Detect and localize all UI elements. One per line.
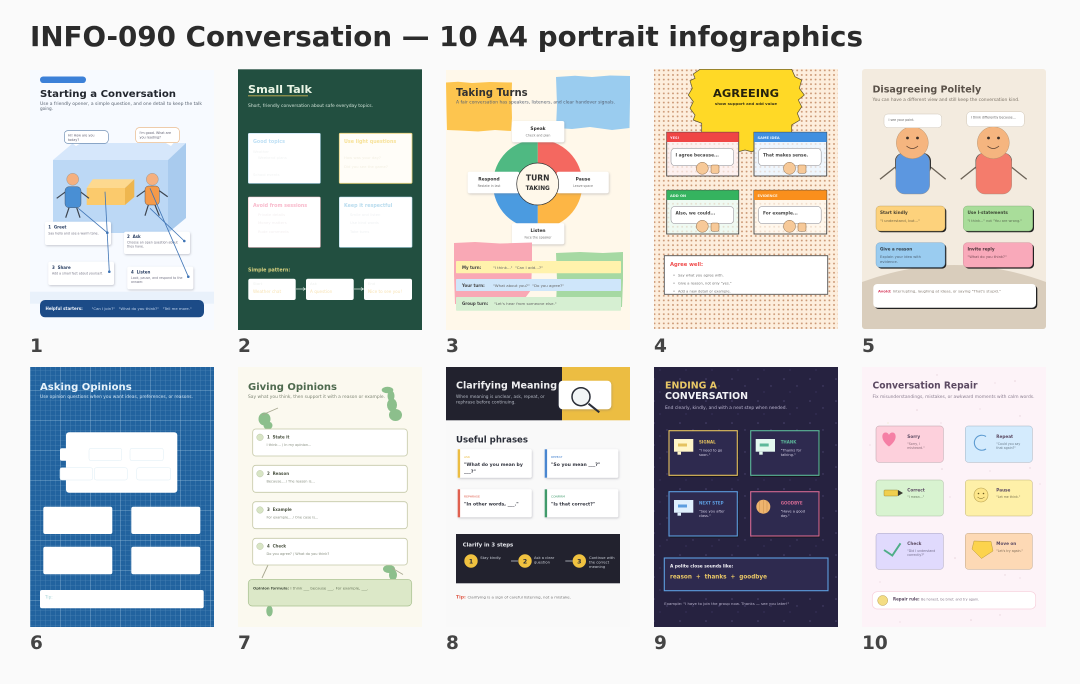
number 1: 1 [30, 336, 43, 357]
panel: 9 ending a conversation [654, 367, 838, 627]
avoid box: Avoid: Interrupting, laughing at ideas, or saying "That's stupid." [878, 288, 1001, 294]
wheel hub: TURN [526, 174, 549, 182]
number 10: 10 [862, 633, 888, 654]
avoid box [873, 284, 1037, 309]
subtitle: Short, friendly conversation about safe everyday topics. [248, 103, 373, 109]
steps panel: Continue with [589, 556, 615, 560]
heading: Disagreeing Politely [872, 85, 982, 96]
step 4 card [253, 538, 407, 565]
row my turn [456, 261, 621, 273]
underline [248, 95, 308, 96]
card thank [751, 431, 820, 477]
pattern step 3: End [368, 281, 376, 286]
title: INFO-090 Conversation — 10 A4 portrait infographics [30, 20, 863, 53]
heading: Small Talk [248, 83, 313, 96]
wheel hub [517, 163, 559, 205]
formula box [248, 579, 412, 606]
step 4 card: 4 Check [267, 544, 286, 548]
step 3 card: 3 Example [267, 507, 292, 512]
number 9: 9 [654, 633, 667, 654]
subtitle: Say what you think, then support it with a reason or example. [248, 394, 385, 399]
card thank: THANK [781, 439, 797, 444]
card add on: Also, we could... [676, 210, 716, 216]
card pause: Leave space [573, 184, 593, 188]
phrase card repeat: REPEAT [551, 455, 563, 459]
card light questions: How was your day? [344, 155, 381, 160]
steps panel: Clarify in 3 steps [463, 542, 513, 548]
card move on [965, 533, 1032, 569]
tip: Tip: Clarifying is a sign of careful listening, not a mistake. [456, 594, 571, 600]
person left [57, 173, 89, 218]
card bottom right [131, 547, 200, 574]
subtitle: going. [40, 106, 53, 111]
card evidence: EVIDENCE [758, 194, 778, 198]
card same idea: That makes sense. [763, 152, 809, 158]
subtitle: End clearly, kindly, and with a next step when needed. [665, 405, 787, 411]
person left [880, 127, 946, 194]
repair rule [872, 592, 1036, 609]
useful phrases heading: Useful phrases [456, 435, 528, 445]
phrase card ask: ___?" [464, 469, 476, 475]
step 3 card: For example... / One case is... [266, 516, 318, 520]
row your turn: Your turn: [461, 283, 485, 288]
polite close box: A polite close sounds like: [670, 564, 734, 570]
card light questions: Use light questions [344, 139, 396, 145]
agree well box: Say what you agree with. [678, 274, 724, 278]
card give a reason: Explain your idea with [880, 255, 922, 259]
step 2 card [253, 465, 407, 492]
card repeat: that again?" [996, 446, 1016, 450]
subtitle: Fix misunderstandings, mistakes, or awkward moments with calm words. [872, 394, 1034, 400]
panel: 5 disagreeing politely [862, 69, 1046, 329]
polite close box [664, 558, 828, 591]
card avoid: Money matters [258, 220, 287, 225]
card sorry: "Sorry, I [907, 442, 920, 446]
card correct [876, 480, 943, 516]
phrase card ask: "What do you mean by [464, 462, 523, 468]
number 4: 4 [654, 336, 667, 357]
speech bubble left: I see your point. [888, 118, 914, 122]
card give a reason [876, 243, 946, 269]
steps panel: meaning [589, 565, 605, 569]
steps panel: 1 [469, 558, 473, 565]
card invite reply: "What do you think?" [968, 255, 1007, 259]
callout 4: answer. [131, 280, 143, 284]
helpful starters bar: Helpful starters: [46, 306, 83, 311]
vine blobs [258, 387, 403, 616]
torn paper pink [454, 242, 532, 305]
speech bubble left: today? [68, 138, 79, 142]
panel: 7 giving opinions [238, 367, 422, 627]
pattern step 1: Weather chat [253, 289, 281, 294]
torn paper blue [556, 76, 630, 130]
agree well box: Agree well: [670, 262, 703, 268]
card give a reason: Give a reason [880, 246, 912, 252]
card goodbye: GOODBYE [781, 500, 803, 506]
card repeat: "Could you say [996, 442, 1020, 446]
row my turn: My turn: [462, 265, 482, 270]
step 3 card [253, 502, 407, 529]
heading: Taking Turns [456, 88, 528, 99]
card evidence [754, 190, 827, 234]
callout 1: 1 Greet [48, 224, 67, 230]
pattern step 2: A question [310, 289, 333, 294]
step 1 card: I think... / In my opinion... [266, 443, 311, 447]
speech bubble right: I'm good. What are [140, 131, 171, 135]
card start kindly: "I understand, but..." [880, 218, 920, 223]
panel: 3 taking turns [446, 70, 630, 330]
torn paper yellow [446, 82, 512, 132]
card move on: Move on [996, 541, 1016, 546]
phrase card repeat: "So you mean ___?" [551, 462, 600, 468]
step 1 card: 1 State it [267, 434, 289, 440]
heading: Asking Opinions [40, 382, 132, 393]
row group turn: "Let's hear from someone else." [494, 301, 557, 306]
heading: CONVERSATION [665, 391, 748, 402]
card give a reason: evidence. [880, 260, 898, 264]
card yes [667, 132, 739, 176]
panel: 2 small talk [238, 69, 422, 330]
card next step: "See you after [699, 510, 725, 514]
pattern step 1: Start [253, 281, 263, 286]
row group turn [456, 297, 621, 311]
repair rule: Repair rule: Be honest, be brief, and try again. [893, 597, 979, 602]
subtitle: You can have a different view and still keep the conversation kind. [871, 97, 1020, 102]
callout 2: 2 Ask [127, 234, 141, 239]
heading: Starting a Conversation [40, 89, 176, 100]
speech bubble left [64, 131, 108, 146]
card yes: I agree because... [676, 152, 719, 158]
heading: Giving Opinions [248, 382, 337, 393]
phrase card rephrase: "In other words, ___." [464, 502, 519, 508]
pattern step 3 [364, 279, 412, 300]
card sorry: misheard." [907, 446, 925, 450]
card respectful: Smile and listen [350, 212, 381, 217]
steps panel: 3 [577, 558, 581, 565]
callout 2: they have. [127, 245, 144, 249]
card thank: talking." [781, 453, 796, 457]
phrase card rephrase [458, 489, 532, 517]
card respond: Respond [478, 176, 500, 182]
card respectful: Take turns [349, 229, 369, 234]
steps panel: question [534, 560, 551, 564]
speech bubble right [136, 128, 179, 146]
step 2 card: Because... / The reason is... [266, 479, 315, 483]
band [30, 292, 214, 304]
number 5: 5 [862, 336, 875, 357]
card listen [512, 223, 564, 244]
agree well box: Give a reason, not only "yes." [678, 282, 732, 286]
card avoid: Avoid from sessions [253, 203, 307, 209]
speech bubble left [884, 114, 942, 128]
card avoid: Rude comments [258, 229, 289, 234]
subtitle: Use a friendly opener, a simple question, and one detail to keep the talk [40, 101, 203, 106]
card respond [468, 172, 519, 193]
phrase card confirm: "Is that correct?" [551, 502, 595, 508]
card next step: class." [699, 514, 711, 518]
subtitle: When meaning is unclear, ask, repeat, or [456, 394, 545, 400]
card move on: "Let's try again." [996, 549, 1024, 553]
card use i-statements: "I think..." not "You are wrong." [968, 219, 1022, 223]
row your turn [456, 279, 621, 291]
pill tag [40, 76, 86, 83]
example: Example: "I have to join the group now. Thanks — see you later!" [664, 601, 789, 606]
card start kindly: Start kindly [880, 210, 908, 215]
helpful starters bar: "Can I join?" "What do you think?" "Tell me more." [92, 307, 192, 311]
card signal: soon." [699, 453, 711, 457]
panel: 1 starting a conversation [30, 70, 214, 330]
steps panel: Stay kindly. [480, 556, 502, 560]
card correct: "I mean..." [907, 495, 925, 499]
card check: correctly?" [907, 553, 925, 557]
card pause: "Let me think." [996, 495, 1021, 499]
leader lines [78, 188, 189, 278]
card respectful: Keep it respectful [344, 203, 393, 209]
card light questions: Did you see the game? [344, 164, 388, 169]
agree well box: Add a new detail or example. [678, 290, 731, 294]
row your turn: "What about you?" "Do you agree?" [493, 283, 564, 288]
phrase card confirm [545, 489, 618, 517]
tip bar: Tip: [44, 594, 53, 600]
card speak: Speak [530, 126, 546, 132]
step 2 card: 2 Reason [267, 471, 289, 476]
card pause: Pause [996, 488, 1011, 492]
arrow [354, 288, 364, 290]
card goodbye: "Have a good [781, 510, 805, 514]
ground [862, 265, 1046, 329]
card goodbye [751, 492, 820, 537]
card good topics: Weather [253, 149, 269, 154]
phrase card repeat [545, 449, 618, 478]
speckles [869, 374, 1041, 623]
row my turn: "I think..." "Can I add...?" [493, 265, 543, 270]
number 8: 8 [446, 633, 459, 654]
number 3: 3 [446, 336, 459, 357]
callout 4: 4 Listen [131, 269, 150, 274]
card use i-statements: Use I-statements [968, 210, 1008, 215]
card next step [669, 492, 738, 537]
person right [961, 127, 1027, 194]
card good topics: School events [253, 172, 280, 177]
step 4 card: Do you agree? / What do you think? [266, 552, 329, 556]
number 2: 2 [238, 336, 251, 357]
card add on: ADD ON [670, 194, 686, 198]
card speak: Check and plan [526, 134, 550, 138]
speech bubble right: you reading? [140, 136, 161, 140]
subtitle: A fair conversation has speakers, listeners, and clear handover signals. [456, 100, 615, 104]
steps panel: the correct [589, 560, 610, 564]
tip bar [40, 590, 204, 608]
heading: Conversation Repair [872, 380, 978, 391]
card top left [43, 507, 112, 534]
steps panel: 2 [523, 558, 527, 565]
subtitle: Use opinion questions when you want ideas, preferences, or reasons. [40, 394, 193, 400]
person right [137, 173, 168, 216]
card signal: SIGNAL [699, 439, 716, 444]
card invite reply: Invite reply [968, 246, 995, 252]
pattern step 1 [248, 279, 296, 300]
steps panel: Ask a clear [534, 556, 555, 560]
panel: 10 conversation repair [862, 367, 1046, 627]
card check: Check [907, 541, 922, 546]
card goodbye: day." [781, 514, 790, 518]
card same idea [754, 132, 827, 176]
panel: 8 clarifying meaning [446, 367, 630, 627]
phrase card ask [458, 449, 532, 478]
number 6: 6 [30, 633, 43, 654]
card listen: Listen [530, 228, 546, 234]
wheel hub: TAKING [526, 186, 550, 192]
donut wheel [493, 139, 582, 229]
large 3d box [53, 143, 186, 233]
magnifier card [559, 381, 611, 412]
simple pattern label: Simple pattern: [248, 268, 290, 274]
heading: Clarifying Meaning [456, 380, 557, 391]
card start kindly [876, 206, 946, 232]
card good topics [248, 133, 320, 183]
callout 2: Choose an open question about [127, 240, 178, 244]
speech bubble left: Hi! How are you [68, 134, 94, 138]
pattern step 3: Nice to see you! [368, 289, 402, 294]
callout 4: Look, pause, and respond to the [131, 276, 183, 280]
card invite reply [963, 243, 1034, 269]
subtitle: show support and add value [715, 101, 777, 106]
card sorry [876, 426, 943, 462]
pattern step 2 [306, 279, 354, 300]
card use i-statements [963, 206, 1034, 232]
card next step: NEXT STEP [699, 500, 724, 506]
card evidence: For example... [763, 210, 798, 216]
header dark [446, 367, 562, 420]
panel: 4 agreeing [654, 69, 838, 329]
card check [876, 533, 943, 569]
card add on [667, 190, 739, 234]
arrow [296, 288, 306, 290]
card yes: YES! [669, 136, 680, 140]
question board [60, 432, 177, 493]
card respectful [339, 197, 412, 247]
panel: 6 asking opinions [30, 367, 214, 627]
card listen: Face the speaker [524, 236, 552, 240]
number 7: 7 [238, 633, 251, 654]
card avoid: Private details [258, 212, 285, 217]
card signal [669, 431, 738, 477]
callout 4 [127, 267, 193, 289]
card respond: Restate in last [478, 184, 501, 188]
small yellow box [87, 179, 134, 205]
callout 3: Add a small fact about yourself. [52, 272, 103, 276]
helpful starters bar [40, 300, 204, 317]
callout 2 [124, 232, 190, 254]
speech bubble right [967, 112, 1024, 127]
card check: "Did I understand [907, 549, 935, 553]
card pause: Pause [576, 176, 590, 182]
card repeat [965, 426, 1032, 462]
agree well box [664, 256, 828, 294]
card speak [512, 121, 564, 142]
card correct: Correct [907, 488, 925, 492]
card thank: "Thanks for [781, 448, 802, 452]
formula box: Opinion formula: I think ___ because ___. For example, ___. [253, 586, 368, 590]
subtitle: rephrase before continuing. [456, 400, 516, 406]
speech bubble right: I think differently because... [971, 116, 1016, 120]
starburst [688, 69, 804, 152]
row group turn: Group turn: [462, 301, 489, 306]
card repeat: Repeat [996, 434, 1013, 439]
header gold [562, 367, 630, 420]
pattern step 2: Ask [310, 281, 318, 286]
phrase card ask: ASK [464, 455, 471, 459]
card same idea: SAME IDEA [758, 136, 780, 140]
callout 3 [48, 262, 114, 285]
heading: ENDING A [665, 381, 718, 392]
callout 1: Say hello and use a warm tone. [48, 231, 99, 235]
card bottom left [43, 547, 112, 574]
card light questions [339, 133, 412, 183]
torn paper green [556, 252, 623, 307]
card pause [965, 480, 1032, 516]
callout 1 [45, 222, 111, 245]
card pause [557, 172, 609, 193]
polite close box: reason + thanks + goodbye [670, 574, 767, 580]
phrase card confirm: CONFIRM [551, 494, 565, 498]
card sorry: Sorry [907, 434, 920, 439]
card good topics: Good topics [253, 139, 285, 145]
phrase card rephrase: REPHRASE [464, 494, 480, 498]
callout 3: 3 Share [52, 265, 71, 270]
card respectful: Use kind words [350, 220, 379, 225]
step 1 card [253, 429, 407, 456]
card signal: "I need to go [699, 448, 722, 452]
steps panel [456, 534, 620, 583]
card top right [131, 507, 200, 534]
heading: AGREEING [713, 87, 779, 100]
card good topics: Weekend plans [258, 155, 287, 160]
card avoid [248, 197, 320, 247]
